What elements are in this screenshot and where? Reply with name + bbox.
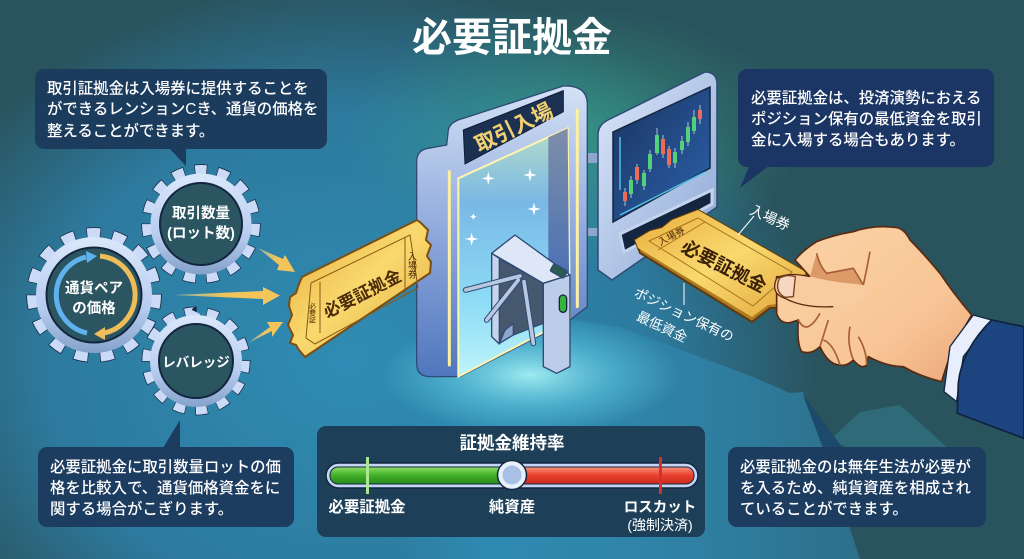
thumb: [775, 275, 873, 307]
gate light strips: [449, 110, 577, 365]
ticket in slot: 入場券: [656, 224, 687, 248]
sign: [463, 91, 563, 164]
callout: top left: ができるレンションCき、通貨の価格を: [47, 99, 318, 118]
panel: margin maintenance ratio: 純資産: [489, 497, 535, 516]
panel: margin maintenance ratio: (強制決済): [627, 517, 693, 533]
trading monitor: [588, 72, 717, 280]
callout: bottom right: ていることができます。: [740, 499, 908, 518]
sign label: 取引入場: [471, 99, 557, 157]
left ticket: 必要証: [308, 302, 316, 325]
panel heading: 証拠金維持率: [460, 433, 564, 453]
callout: bottom right: を入るため、純貨資産を相成され: [740, 478, 971, 497]
gear: leverage: レバレッジ: [162, 355, 230, 370]
left ticket: [288, 220, 431, 357]
callout: bottom right: 必要証拠金のは無年生法が必要が: [740, 457, 971, 476]
turnstile: [492, 235, 570, 373]
left ticket: 入場券: [407, 251, 417, 279]
callout: top left: 取引証拠金は入場券に提供することを: [47, 80, 309, 98]
ticket in slot: [635, 210, 808, 322]
card slot: [620, 190, 712, 252]
gear: currency pair price: の価格: [72, 299, 116, 317]
jacket sleeve: [957, 320, 1024, 438]
callout: top left: 整えることができます。: [47, 121, 214, 140]
callout: top right: 金に入場する場合もあります。: [751, 131, 965, 149]
gear: trade quantity: [147, 170, 255, 278]
shirt cuff: [944, 315, 992, 402]
gear: currency pair price: [32, 234, 156, 356]
gate frame: [417, 86, 587, 377]
panel: margin maintenance ratio: ロスカット: [624, 499, 696, 516]
gear: trade quantity: (ロット数): [167, 224, 235, 242]
callout: top right: 必要証拠金は、投済演勢におえる: [751, 89, 981, 107]
gear: currency pair price: 通貨ペア: [65, 279, 123, 297]
title: 必要証拠金: [412, 16, 612, 60]
ticket in slot: 必要証拠金: [678, 236, 770, 297]
left ticket: 必要証拠金: [320, 265, 405, 322]
callout: top left: [35, 69, 327, 166]
callout: top right: ポジション保有の最低資金を取引: [751, 110, 982, 128]
chart screen: [613, 87, 710, 222]
label: minimum funds: 最低資金: [634, 309, 690, 345]
callout: bottom left: 関する場合がこぎります。: [50, 499, 233, 518]
callout: bottom left: 必要証拠金に取引数量ロットの価: [50, 458, 281, 476]
gate opening: [458, 128, 570, 377]
gear: leverage: [147, 312, 245, 410]
sparkles: [465, 168, 541, 246]
label: ticket: 入場券: [748, 202, 792, 233]
turnstile arms: [466, 276, 533, 343]
entry gate: [417, 86, 587, 377]
hand: [775, 227, 1024, 438]
arrows into ticket: [173, 248, 295, 343]
gauge labels: 必要証拠金: [329, 497, 406, 516]
callout: top right: [738, 69, 994, 188]
callout: bottom left: [38, 420, 294, 527]
gauge bar: [326, 457, 698, 494]
label: minimum funds: ポジション保有の: [632, 285, 736, 345]
candlesticks: [623, 105, 702, 206]
callout: bottom right: [728, 395, 986, 527]
callout: bottom left: 格を比較入で、通貨価格資金をに: [50, 478, 280, 497]
panel: margin maintenance ratio: [317, 426, 705, 537]
gear: trade quantity: 取引数量: [172, 204, 230, 222]
